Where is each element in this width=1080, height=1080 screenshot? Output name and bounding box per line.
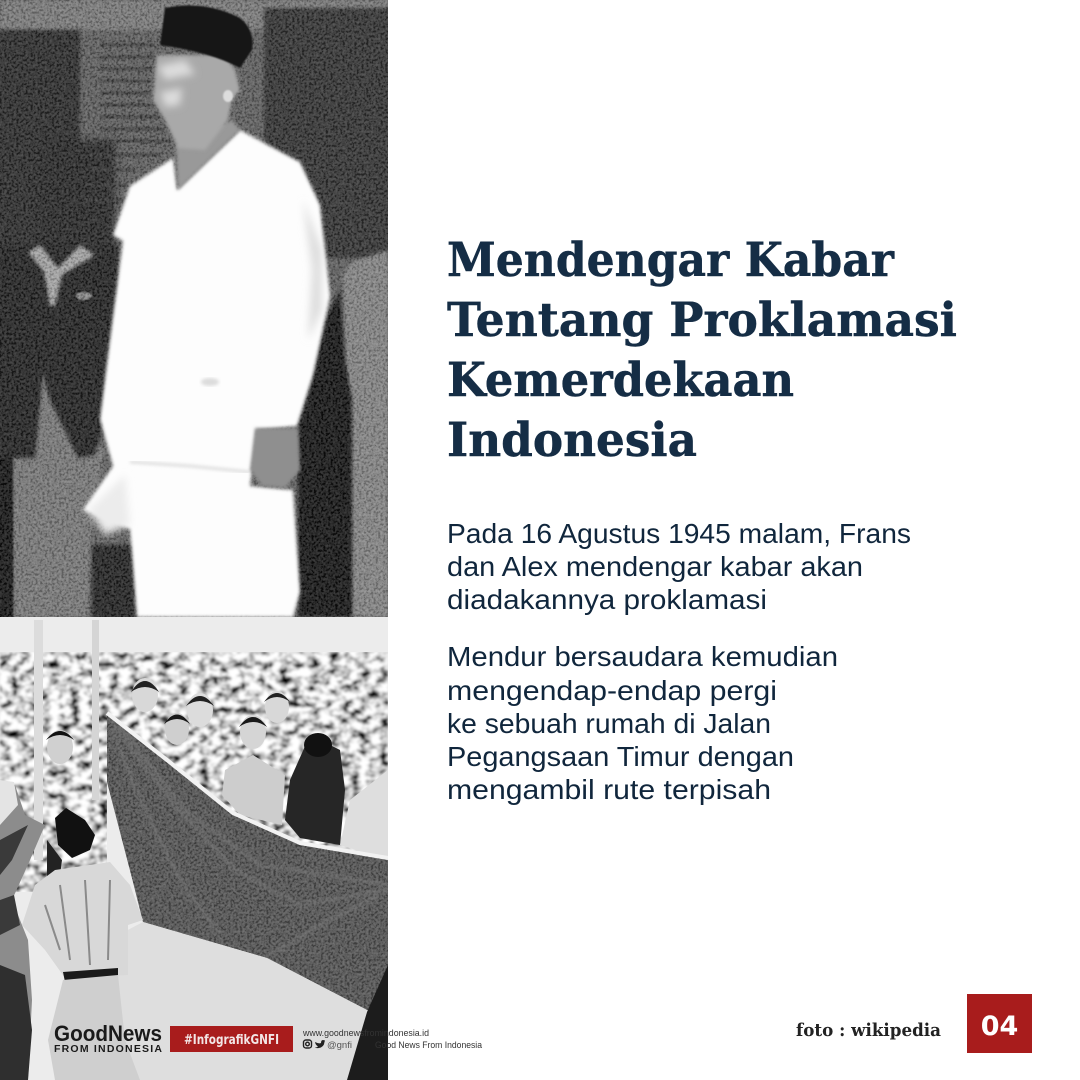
page number badge: 04: [981, 1011, 1018, 1042]
brick wall courses: [85, 45, 170, 200]
man seen from behind: neck shadow: [47, 840, 62, 880]
hand: [250, 428, 300, 488]
man on left: collar: [28, 245, 95, 306]
icon: instagram: [304, 1040, 312, 1048]
social and website: www.goodnewsfromindonesia.id: [302, 1028, 429, 1039]
man on left: jacket: [0, 245, 120, 458]
pole: [34, 620, 43, 860]
title: Mendengar Kabar: [447, 233, 895, 288]
crowd texture: [0, 652, 388, 892]
foreground faces: [46, 678, 388, 860]
paragraph 1: [447, 518, 911, 615]
bag shading: [88, 475, 130, 535]
man on right: grey figure: [343, 250, 388, 617]
photo credit: foto : wikipedia: [796, 1020, 941, 1041]
face: [153, 55, 240, 150]
icon: twitter: [315, 1040, 325, 1048]
paragraph 2: Pegangsaan Timur dengan: [447, 741, 794, 772]
title: Kemerdekaan: [447, 353, 794, 408]
title: [447, 233, 957, 468]
flag cloth: [107, 715, 388, 1012]
man seen from behind: belt: [63, 968, 118, 980]
paragraph 1: dan Alex mendengar kabar akan: [447, 551, 863, 582]
title: Indonesia: [447, 413, 697, 468]
white clothing: [83, 130, 330, 617]
dark gap by hand: [92, 545, 136, 620]
man on left: trousers: [12, 370, 105, 617]
paragraph 1: diadakannya proklamasi: [447, 584, 767, 615]
photo: flag raising crowd: [0, 617, 388, 1080]
waist band: [130, 462, 250, 472]
photo: man in white standing: [0, 0, 394, 620]
page number badge: [967, 994, 1032, 1053]
man seen from behind: shirt: [22, 862, 143, 978]
cap: [160, 6, 252, 68]
paragraph 2: Mendur bersaudara kemudian: [447, 641, 838, 672]
paragraph 2: ke sebuah rumah di Jalan: [447, 708, 771, 739]
shirt shading: [303, 200, 322, 340]
man seen from behind: hair: [55, 808, 95, 858]
social and website: [302, 1028, 483, 1051]
social and website: Good News From Indonesia: [375, 1040, 483, 1051]
dark doorway left: [0, 30, 80, 255]
logo: GoodNews From Indonesia: GoodNews: [54, 1021, 162, 1046]
paragraph 2: mengendap-endap pergi: [447, 675, 777, 706]
hashtag badge: #InfografikGNFI: [184, 1033, 279, 1048]
flag fold highlights: [112, 722, 388, 955]
flag top hem: [107, 713, 388, 858]
left foreground figures: [0, 785, 45, 1080]
photo grain: [0, 0, 388, 617]
social and website: @gnfi: [327, 1040, 352, 1051]
hashtag badge: [170, 1026, 293, 1052]
paragraph 2: [447, 641, 838, 805]
paragraph 2: mengambil rute terpisah: [447, 774, 771, 805]
flag white lower panel: [118, 922, 367, 1080]
neck: [176, 120, 240, 190]
man seen from behind: trousers: [48, 975, 140, 1080]
black shadow right of man: [298, 290, 352, 617]
dark doorway right: [264, 8, 394, 258]
dark right corner: [347, 965, 388, 1080]
title: Tentang Proklamasi: [447, 293, 957, 348]
logo: GoodNews From Indonesia: FROM INDONESIA: [54, 1043, 162, 1055]
paragraph 1: Pada 16 Agustus 1945 malam, Frans: [447, 518, 911, 549]
